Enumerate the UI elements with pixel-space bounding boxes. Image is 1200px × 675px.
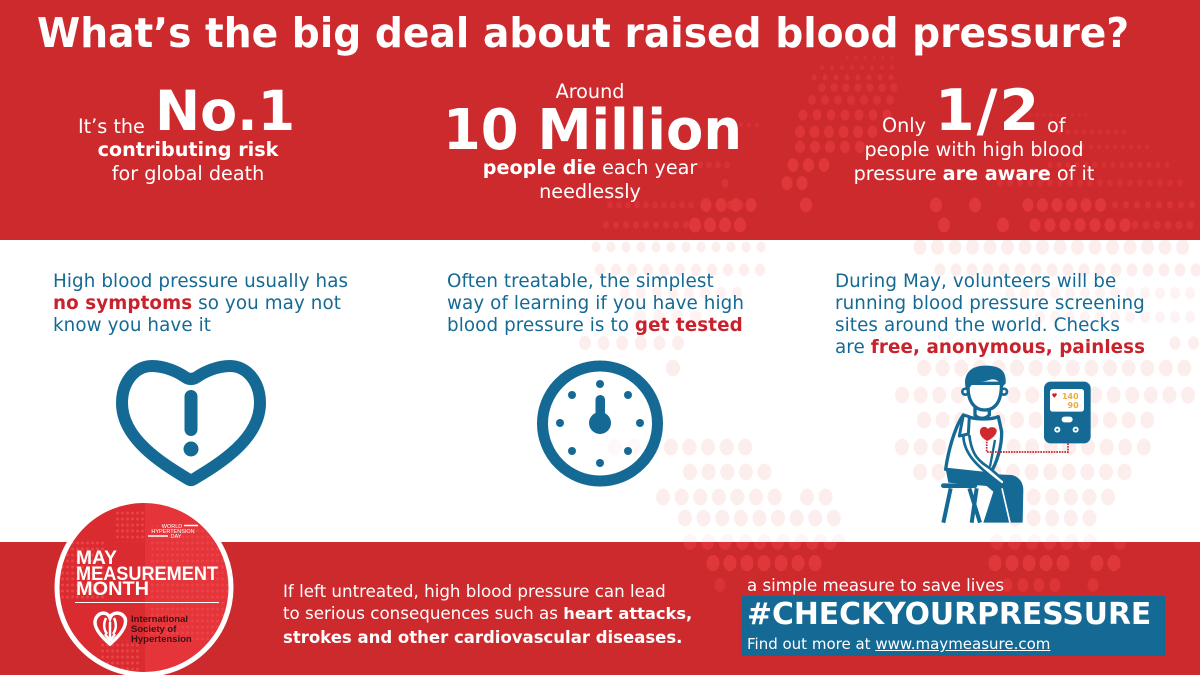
stat: No.1 contributing risk [78,79,295,185]
stat caption: people with high blood [864,138,1084,161]
stat caption: for global death [112,162,264,185]
head [975,407,989,418]
world hypertension day mark: HYPERTENSION [151,529,195,535]
text: no symptoms: know you have it [53,315,211,336]
stat number: No.1 [155,79,295,143]
text: consequences: If left untreated, high blood pressure can lead [283,581,666,601]
icon: seated person with blood pressure monitor: 140 [1062,392,1079,401]
badge heading [76,548,218,600]
heart [980,427,997,441]
badge heading: MEASUREMENT [76,564,218,585]
text: get tested: way of learning if you have high [447,293,744,314]
stat caption bold: contributing risk [98,138,278,161]
text: screening sites: sites around the world. Checks [835,315,1120,336]
badge heading: MONTH [76,579,149,600]
tagline: a simple measure to save lives [747,576,1004,595]
text: get tested: Often treatable, the simplest [447,271,714,292]
text: screening sites: During May, volunteers will be [835,271,1116,292]
text: no symptoms: no symptoms so you may not [53,293,341,314]
hashtag: #CHECKYOURPRESSURE [747,597,1151,632]
ISH text: Hypertension [131,634,192,645]
ISH text: Society of [131,624,177,635]
text: screening sites: are free, anonymous, painless [835,337,1145,358]
text: no symptoms: High blood pressure usually has [53,271,348,292]
ISH heart logo [95,613,126,644]
world hypertension day mark [148,524,198,540]
website: Find out more at www.maymeasure.com [747,635,1050,653]
stat caption line two: needlessly [539,180,641,203]
legs [946,471,1023,523]
stat: 10 Million die [443,80,742,203]
text: screening sites [835,271,1145,358]
monitor [1044,382,1091,443]
background dotted world map [579,56,1200,592]
text: consequences: strokes and other cardiovascular diseases. [283,628,682,647]
badge heading: MAY [76,548,117,569]
stat number: 10 Million [443,98,742,163]
world hypertension day mark: DAY [171,534,182,540]
text: no symptoms [53,271,348,336]
title: What’s the big deal about raised blood pressure? [37,9,1129,57]
text: consequences [283,581,692,647]
dotted connector [987,442,1068,452]
torso [946,415,1002,474]
stat lead-in: It’s the [78,115,145,138]
stat caption: people die each year [483,156,697,179]
text: screening sites: running blood pressure screening [835,293,1145,314]
world hypertension day mark: WORLD [162,524,182,530]
text: get tested [447,271,744,336]
stat lead-in: Only [882,114,926,137]
text: consequences: to serious consequences such as heart attacks, [283,603,692,623]
stat: 1/2 aware [854,78,1094,185]
white middle band [0,240,1200,542]
stat lead-in: Around [556,80,624,103]
hair [965,366,1006,388]
call to action box [742,596,1165,656]
text: get tested: blood pressure is to get tested [447,315,743,336]
stool [943,486,980,523]
icon: seated person with blood pressure monitor: 90 [1068,401,1079,410]
stat caption line two: pressure are aware of it [854,162,1094,185]
stat number: 1/2 [935,78,1041,144]
badge: May Measurement Month [54,503,234,675]
arm [963,435,1004,485]
ISH text [131,614,192,645]
ISH text: International [131,614,188,625]
stat suffix: of [1047,114,1066,137]
